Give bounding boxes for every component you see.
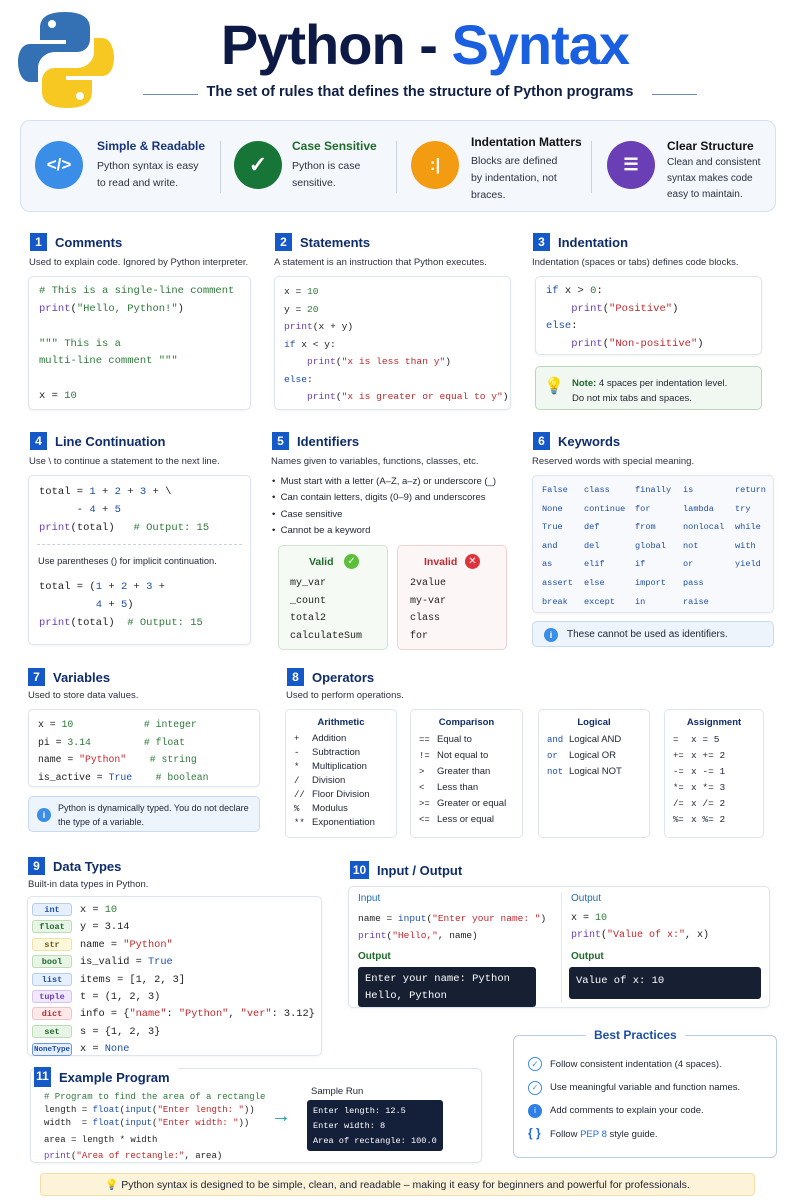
panel: example program [30, 1068, 482, 1163]
heading: 2 statements: 2 [280, 235, 287, 249]
panel: best practices: ✓ [532, 1083, 538, 1092]
box: assignment: += [673, 751, 684, 761]
box: invalid: Invalid [424, 556, 457, 568]
box: assignment: Assignment [687, 717, 741, 728]
box: arithmetic: Multiplication [312, 761, 367, 772]
panel: best practices: Follow consistent indentation (4 spaces). [550, 1059, 722, 1070]
heading: 11 example program: 11 [36, 1069, 49, 1083]
box: comparison: != [419, 751, 430, 761]
desc: variables: Used to store data values. [28, 690, 138, 701]
box: arithmetic: Exponentiation [312, 817, 375, 828]
note: variables: Python is dynamically typed. You do not declare [58, 803, 249, 813]
feature: indentation matters: Blocks are defined [471, 155, 557, 167]
heading: 11 example program [34, 1067, 178, 1087]
box: assignment: = [673, 735, 678, 745]
box: comparison: == [419, 735, 430, 745]
box: assignment: -= [673, 767, 684, 777]
note: keywords: These cannot be used as identifiers. [567, 629, 728, 640]
box: comparison: Not equal to [437, 750, 488, 761]
heading: 3 indentation: 3 [538, 235, 545, 249]
box: logical [538, 709, 650, 838]
box: arithmetic: / [294, 776, 299, 786]
box: arithmetic: Floor Division [312, 789, 370, 800]
icon: check: ✓ [347, 556, 356, 567]
icon: cross [465, 554, 480, 569]
code: line continuation: Use parentheses () for implicit continuation. [38, 556, 217, 566]
feature: clear structure [607, 139, 760, 200]
code: indentation [535, 276, 762, 355]
panel: best practices: Add comments to explain your code. [550, 1105, 704, 1116]
box: valid: Valid [309, 556, 334, 568]
box: assignment: x /= 2 [691, 798, 725, 809]
box: assignment: x %= 2 [691, 814, 725, 825]
panel: features [20, 120, 776, 212]
feature: case sensitive: Case Sensitive [292, 139, 377, 153]
feature: clear structure: syntax makes code [667, 173, 753, 184]
icon: info: i [43, 810, 45, 820]
note: variables [28, 796, 260, 832]
box: logical: and [547, 735, 563, 745]
feature: indentation matters [411, 135, 582, 201]
feature: indentation matters: by indentation, not [471, 172, 557, 184]
desc: comments: Used to explain code. Ignored by Python interpreter. [29, 257, 248, 268]
feature: case sensitive: ✓ [249, 152, 267, 177]
output side: x = 10 print("Value of x:", x) [571, 913, 709, 941]
box: comparison: >= [419, 799, 430, 809]
heading: 6 keywords [533, 432, 620, 450]
heading: 10 input/output: Input / Output [377, 862, 462, 878]
box: valid: my_var _count total2 calculateSum [290, 578, 362, 642]
feature: indentation matters: :| [430, 155, 440, 174]
list: identifier rules: • Can contain letters, digits (0–9) and underscores [272, 492, 486, 503]
code: comments: # This is a single-line comment print("Hello, Python!") """ This is a multi-line comment """ x = 10 [39, 285, 234, 402]
note: indentation: Note: 4 spaces per indentation level. [572, 378, 727, 389]
panel: best practices [513, 1035, 777, 1158]
heading: 7 variables: Variables [53, 670, 110, 684]
box: logical: Logical OR [569, 750, 616, 761]
panel: example program: # Program to find the area of a rectangle length = float(input("Enter length: ")) width = float(input("Enter width: ")) [44, 1092, 265, 1128]
feature: clear structure: easy to maintain. [667, 189, 743, 200]
panel: example program: area = length * width print("Area of rectangle:", area) [44, 1135, 222, 1161]
footer callout [40, 1173, 755, 1196]
box: assignment: %= [673, 815, 684, 825]
input side: name = input("Enter your name: ") print("Hello,", name) [358, 913, 546, 941]
box: logical: Logical NOT [569, 766, 622, 777]
heading: 9 data types: Data Types [53, 858, 121, 874]
list: identifier rules: • Case sensitive [272, 509, 342, 520]
heading: 10 input/output [350, 861, 462, 879]
arrow: → [271, 1105, 291, 1127]
panel: best practices: ✓ [531, 1059, 539, 1069]
box: comparison: Less than [437, 782, 478, 793]
box: assignment: x += 2 [691, 750, 725, 761]
output side: Output [571, 893, 601, 904]
heading: 7 variables [28, 668, 110, 686]
box: invalid: 2value my-var class for [410, 578, 446, 642]
input side: Input [358, 893, 380, 904]
icon: info [544, 628, 558, 642]
heading: 5 identifiers: Identifiers [297, 434, 359, 448]
feature: case sensitive: sensitive. [292, 177, 336, 189]
icon: check [344, 554, 359, 569]
box: comparison: Comparison [439, 717, 494, 728]
list: identifier rules: • Cannot be a keyword [272, 525, 370, 536]
feature: clear structure: Clear Structure [667, 139, 754, 153]
input side: Output [358, 951, 391, 962]
footer callout: 💡 Python syntax is designed to be simple, clean, and readable – making it easy for beginners and powerful for professionals. [105, 1179, 690, 1191]
table: data types: dict [42, 1009, 62, 1019]
desc: data types: Built-in data types in Python. [28, 879, 148, 890]
icon: info [37, 808, 51, 822]
box: comparison: Less or equal [437, 814, 494, 825]
heading: 9 data types [28, 857, 121, 875]
heading: 7 variables: 7 [33, 670, 40, 684]
box: arithmetic: ** [294, 818, 305, 828]
heading: 6 keywords: Keywords [558, 434, 620, 448]
feature: clear structure: ☰ [623, 155, 639, 174]
box: comparison: <= [419, 815, 430, 825]
box: arithmetic: Modulus [312, 803, 348, 814]
heading: 1 comments [30, 233, 122, 251]
box: logical: or [547, 751, 558, 761]
box: arithmetic: * [294, 762, 299, 772]
table: keywords: is lambda nonlocal not or pass raise [683, 485, 724, 607]
heading: 3 indentation [533, 233, 628, 251]
box: comparison [410, 709, 523, 838]
desc: identifiers: Names given to variables, functions, classes, etc. [271, 456, 479, 467]
feature: indentation matters: Indentation Matters [471, 135, 582, 149]
code: variables: x = 10 # integer pi = 3.14 # float name = "Python" # string is_active = True # boolean [38, 719, 209, 782]
box: assignment: /= [673, 799, 684, 809]
input side [358, 893, 546, 1007]
desc: indentation: Indentation (spaces or tabs) defines code blocks. [532, 257, 738, 268]
heading: 3 indentation: Indentation [558, 234, 628, 250]
list: identifier rules: • Must start with a letter (A–Z, a–z) or underscore (_) [272, 476, 496, 487]
box: comparison: Equal to [437, 734, 472, 745]
heading: 11 example program: Example Program [59, 1070, 170, 1084]
box: arithmetic [285, 709, 397, 838]
heading: 2 statements [275, 233, 370, 251]
output side [569, 893, 761, 999]
table: keywords: False None True and as assert break [542, 485, 573, 607]
box: arithmetic: // [294, 790, 305, 800]
box: arithmetic: Division [312, 775, 345, 786]
icon: bulb: 💡 [544, 378, 564, 395]
heading: 1 comments: Comments [55, 234, 122, 250]
box: assignment: *= [673, 783, 684, 793]
table: keywords: finally for from global if import in [635, 485, 671, 607]
table: data types: tuple [39, 992, 65, 1002]
box: arithmetic: Subtraction [312, 747, 360, 758]
panel: best practices: { } [528, 1126, 541, 1140]
heading: 9 data types: 9 [33, 859, 40, 873]
feature: case sensitive [234, 139, 377, 189]
panel: input/output [348, 886, 770, 1008]
box: comparison: > [419, 767, 424, 777]
desc: line continuation: Use \ to continue a statement to the next line. [29, 456, 220, 467]
code: line continuation: total = 1 + 2 + 3 + \ - 4 + 5 print(total) # Output: 15 [39, 486, 209, 534]
box: logical: not [547, 767, 563, 777]
desc: keywords: Reserved words with special meaning. [532, 456, 694, 467]
feature: simple & readable: to read and write. [97, 177, 178, 189]
feature: simple & readable [35, 139, 205, 189]
table: data types: x = 10 y = 3.14 name = "Python" is_valid = True items = [1, 2, 3] t = (1, 2, 3) info = {"name": "Python", "ver": 3.12} s = {1, 2, 3} x = None [80, 904, 315, 1055]
note: keywords [532, 621, 774, 647]
output side: Value of x: 10 [576, 975, 664, 987]
list: identifier rules [272, 476, 496, 536]
code: line continuation [28, 475, 251, 645]
box: comparison: Greater than [437, 766, 490, 777]
table: data types: float [39, 922, 65, 932]
panel: best practices: Use meaningful variable and function names. [550, 1082, 740, 1093]
heading: 8 operators [287, 668, 374, 686]
box: comparison: < [419, 783, 424, 793]
box: valid [278, 545, 388, 650]
table: data types: int [44, 905, 60, 915]
desc: statements: A statement is an instruction that Python executes. [274, 257, 487, 268]
table: keywords [532, 475, 774, 613]
heading: 1 comments: 1 [35, 235, 42, 249]
icon: cross: ✕ [468, 556, 477, 567]
feature: simple & readable: </> [47, 155, 71, 174]
heading: 8 operators: 8 [292, 670, 299, 684]
code: statements: x = 10 y = 20 print(x + y) if x < y: print("x is less than y") else: print("x is greater or equal to y") [284, 286, 509, 402]
heading: 8 operators: Operators [312, 670, 374, 684]
input side: Enter your name: Python Hello, Python [365, 973, 510, 1002]
table: keywords: class continue def del elif else except [584, 485, 625, 607]
table: data types: NoneType [34, 1046, 70, 1054]
box: arithmetic: + [294, 734, 299, 744]
box: arithmetic: Arithmetic [318, 717, 364, 728]
code: line continuation: total = (1 + 2 + 3 + 4 + 5) print(total) # Output: 15 [39, 581, 203, 629]
note: indentation [535, 366, 762, 410]
table: data types: bool [42, 957, 62, 967]
feature: clear structure: Clean and consistent [667, 157, 760, 168]
logo: python [18, 12, 114, 108]
note: variables: the type of a variable. [58, 817, 144, 827]
heading: 4 line continuation: 4 [35, 434, 42, 448]
heading: 5 identifiers [272, 432, 359, 450]
box: arithmetic: - [294, 748, 299, 758]
heading: 4 line continuation: Line Continuation [55, 434, 165, 448]
box: assignment [664, 709, 764, 838]
box: comparison: Greater or equal [437, 798, 506, 809]
heading: 4 line continuation [30, 432, 165, 450]
box: assignment: x -= 1 [691, 766, 725, 777]
desc: operators: Used to perform operations. [286, 690, 404, 701]
title: Python - Syntax [221, 13, 629, 76]
heading: 10 input/output: 10 [353, 863, 366, 877]
table: data types: set [44, 1027, 60, 1037]
table: keywords: return try while with yield [735, 485, 766, 569]
box: assignment: x = 5 [691, 734, 720, 745]
code: variables [28, 709, 260, 787]
note: indentation: Do not mix tabs and spaces. [572, 393, 692, 404]
feature: case sensitive: Python is case [292, 160, 360, 172]
feature: simple & readable: Python syntax is easy [97, 160, 199, 172]
box: arithmetic: % [294, 804, 299, 814]
heading: 5 identifiers: 5 [277, 434, 284, 448]
output side: Output [571, 951, 604, 962]
table: data types: str [44, 940, 60, 950]
heading: 2 statements: Statements [300, 234, 370, 250]
box: arithmetic: Addition [312, 733, 346, 744]
feature: simple & readable: Simple & Readable [97, 139, 205, 153]
panel: example program: Enter length: 12.5 Enter width: 8 Area of rectangle: 100.0 [313, 1106, 437, 1146]
heading: 6 keywords: 6 [538, 434, 545, 448]
box: logical: Logical AND [569, 734, 621, 745]
box: invalid [397, 545, 507, 650]
heading: best practices: Best Practices [594, 1028, 677, 1042]
icon: info: i [550, 630, 552, 640]
code: indentation: if x > 0: print("Positive") else: print("Non-positive") [546, 285, 704, 350]
panel: best practices: Follow PEP 8 style guide. [550, 1129, 658, 1140]
feature: indentation matters: braces. [471, 189, 505, 201]
subtitle: The set of rules that defines the structure of Python programs [206, 84, 634, 100]
box: assignment: x *= 3 [691, 782, 725, 793]
panel: best practices: i [534, 1106, 536, 1115]
panel: example program: Sample Run [311, 1086, 363, 1097]
table: data types: list [42, 975, 62, 985]
box: logical: Logical [577, 717, 611, 728]
